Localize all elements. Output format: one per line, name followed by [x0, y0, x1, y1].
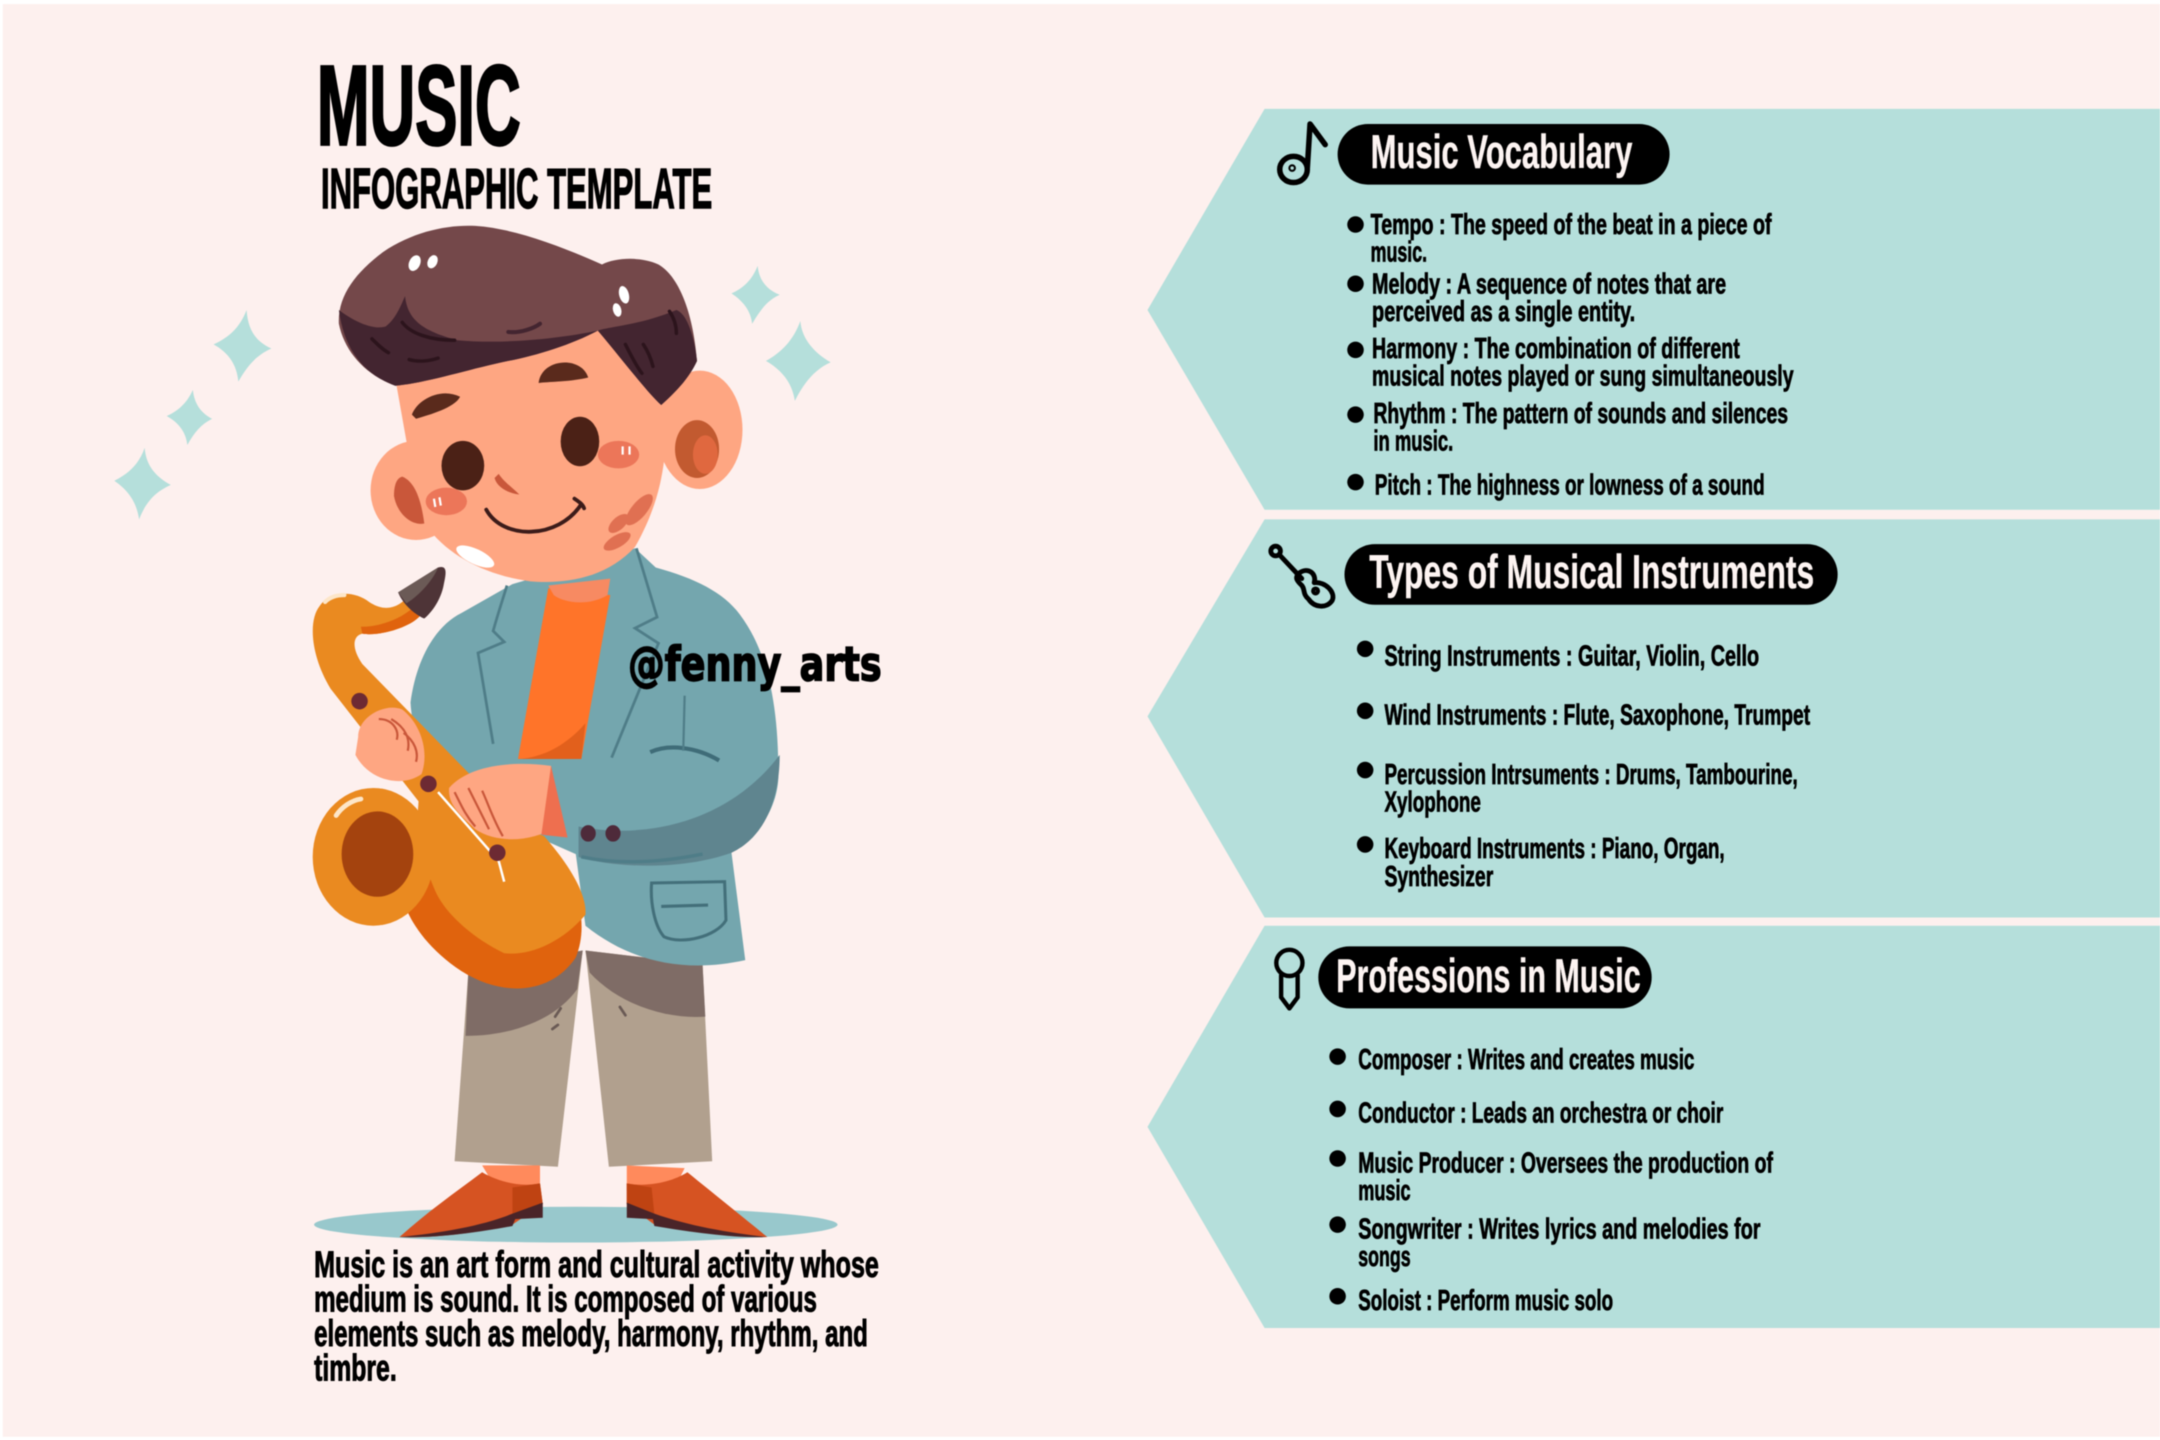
panel shape [1148, 109, 2160, 510]
instruments list: Synthesizer [1384, 860, 1493, 892]
watermark: @fenny_arts [628, 639, 882, 693]
ground shadow [314, 1207, 838, 1243]
vocabulary list: Melody : A sequence of notes that are [1372, 267, 1726, 299]
vocabulary list: Tempo : The speed of the beat in a piece of [1371, 208, 1772, 240]
vocabulary list [1347, 208, 1794, 501]
instruments list: String Instruments : Guitar, Violin, Cello [1384, 639, 1759, 671]
instruments list: Keyboard Instruments : Piano, Organ, [1384, 832, 1725, 864]
hair strands [372, 311, 676, 373]
intro paragraph: Music is an art form and cultural activity whose [314, 1243, 879, 1285]
hands [355, 708, 568, 839]
vocabulary list: Rhythm : The pattern of sounds and silences [1373, 397, 1788, 429]
jacket [411, 548, 780, 965]
intro paragraph: timbre. [314, 1346, 397, 1388]
instruments list [1357, 639, 1811, 892]
title block [317, 43, 712, 220]
heading text: Professions in Music [1336, 950, 1641, 1002]
icon: music note [1280, 124, 1325, 183]
smile [486, 499, 584, 532]
panel: professions in music [1148, 926, 2160, 1328]
saxophone bell opening [342, 811, 413, 897]
heading pill [1344, 544, 1838, 605]
heading pill [1318, 946, 1652, 1008]
vocabulary list: Pitch : The highness or lowness of a sound [1375, 469, 1765, 501]
instruments list: Wind Instruments : Flute, Saxophone, Trumpet [1384, 699, 1811, 731]
title: MUSIC: MUSIC [317, 43, 521, 169]
decorative sparkles [114, 266, 831, 519]
eyebrows [412, 393, 460, 419]
jacket pocket [651, 882, 726, 940]
face [395, 324, 667, 582]
head [339, 226, 742, 582]
illustration: boy playing saxophone [313, 226, 838, 1243]
professions list: music [1358, 1174, 1411, 1206]
vocabulary list: music. [1371, 236, 1427, 268]
left cheek [371, 441, 461, 540]
professions list: songs [1358, 1240, 1411, 1272]
vocabulary list: in music. [1373, 424, 1453, 456]
saxophone [313, 567, 586, 988]
professions list: Composer : Writes and creates music [1358, 1043, 1694, 1075]
vocabulary list: musical notes played or sung simultaneously [1372, 360, 1794, 392]
hair [339, 226, 697, 405]
saxophone keys [351, 693, 506, 861]
panel shape [1148, 519, 2160, 917]
orange shirt [518, 588, 610, 759]
vocabulary list: Harmony : The combination of different [1372, 332, 1740, 364]
panel: types of musical instruments [1148, 519, 2160, 917]
icon: microphone [1276, 950, 1302, 1008]
shoes [399, 1165, 767, 1237]
neck [548, 579, 610, 602]
professions list: Conductor : Leads an orchestra or choir [1358, 1097, 1723, 1129]
mouthpiece [398, 567, 446, 619]
right ear [657, 371, 742, 489]
instruments list: Percussion Intrsuments : Drums, Tambourine, [1384, 758, 1798, 790]
eyes [442, 441, 484, 490]
intro paragraph [314, 1243, 879, 1388]
heading pill [1338, 124, 1670, 185]
professions list [1329, 1043, 1773, 1316]
nose [495, 474, 519, 495]
vocabulary list: perceived as a single entity. [1372, 295, 1635, 327]
heading text: Types of Musical Instruments [1369, 546, 1814, 598]
cheek marks [601, 490, 657, 554]
intro paragraph: medium is sound. It is composed of various [314, 1277, 817, 1319]
professions list: Soloist : Perform music solo [1358, 1284, 1613, 1316]
jacket buttons [581, 825, 621, 842]
intro paragraph: elements such as melody, harmony, rhythm, and [314, 1312, 868, 1354]
icon: guitar [1271, 546, 1333, 606]
panel shape [1148, 926, 2160, 1328]
subtitle: infographic template: INFOGRAPHIC TEMPLATE [321, 157, 712, 220]
blush [426, 488, 467, 515]
heading text: Music Vocabulary [1371, 126, 1632, 178]
professions list: Songwriter : Writes lyrics and melodies for [1358, 1212, 1761, 1244]
instruments list: Xylophone [1384, 785, 1481, 817]
professions list: Music Producer : Oversees the production of [1358, 1146, 1773, 1178]
trousers [455, 951, 712, 1167]
panel: music vocabulary [1148, 109, 2160, 510]
